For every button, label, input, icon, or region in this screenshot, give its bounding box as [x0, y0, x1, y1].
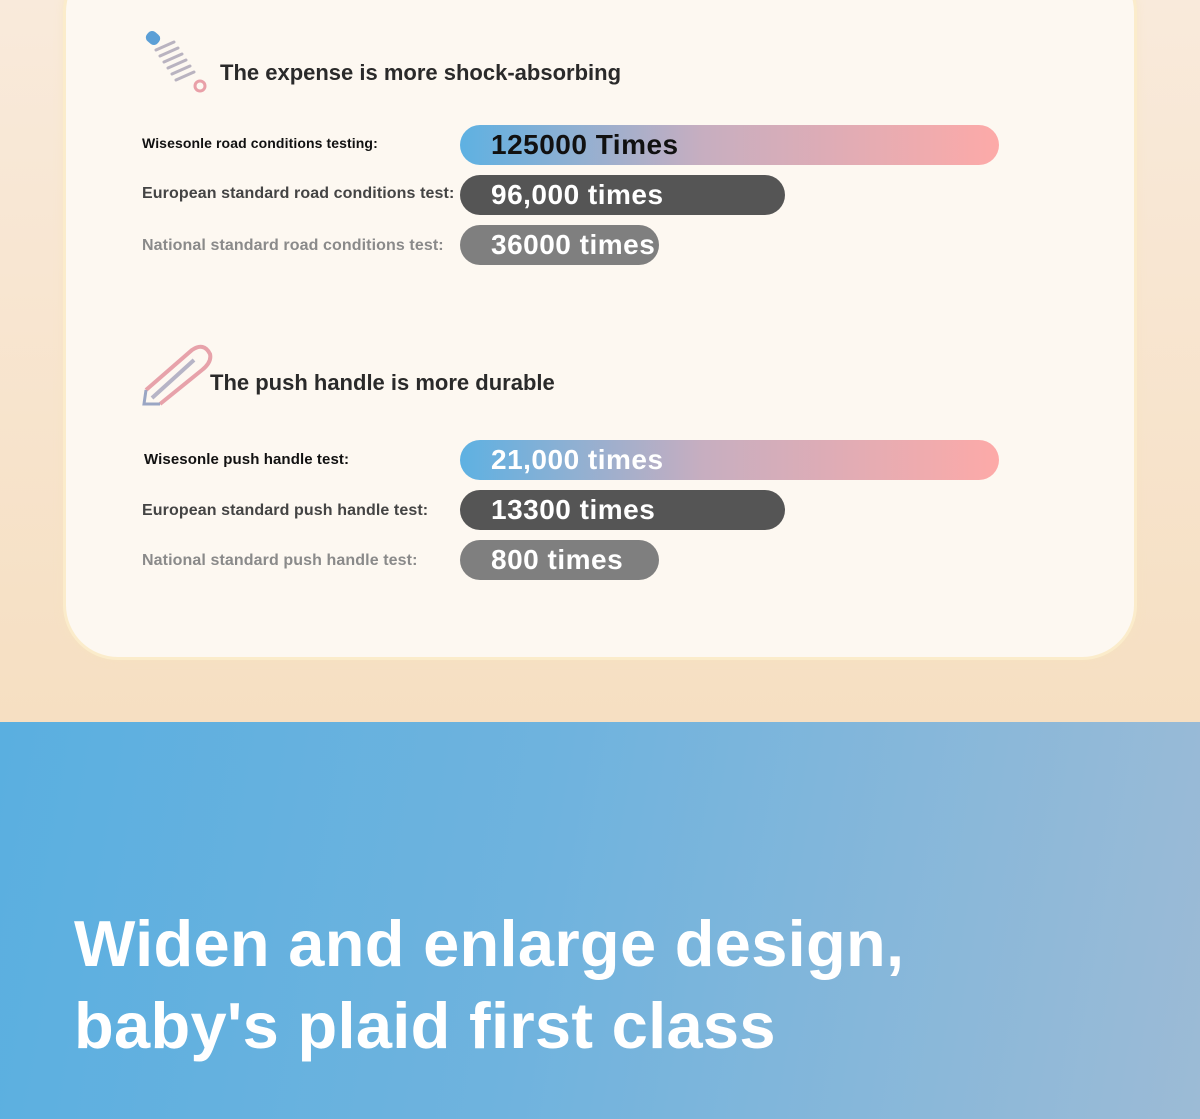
bar: 96000: 96,000 times: [491, 179, 664, 210]
label: wisesonle push: Wisesonle push handle test:: [144, 451, 349, 468]
bar: 96000: [460, 175, 785, 215]
bar: 13300: 13300 times: [491, 494, 655, 525]
label: wisesonle road: Wisesonle road conditions testing:: [142, 135, 378, 151]
bar: 36000: 36000 times: [491, 229, 655, 260]
bar: 800: [460, 540, 659, 580]
panel: blue banner: [0, 722, 1200, 1119]
title: widen and enlarge: Widen and enlarge design,: [74, 907, 904, 980]
panel: test card: [66, 0, 1134, 657]
bar: 125000: [460, 125, 999, 165]
bar: 13300: [460, 490, 785, 530]
title: widen and enlarge: [74, 907, 904, 1062]
bar: 800: 800 times: [491, 544, 623, 575]
label: national road: National standard road conditions test:: [142, 237, 444, 254]
label: european road: European standard road conditions test:: [142, 185, 454, 202]
heading: push handle: The push handle is more durable: [210, 370, 555, 395]
icon: shock absorber: [146, 31, 206, 92]
title: widen and enlarge: baby's plaid first class: [74, 989, 776, 1062]
icon: push handle: [142, 344, 212, 406]
label: european push: European standard push handle test:: [142, 502, 428, 519]
heading: shock-absorbing: The expense is more shock-absorbing: [220, 60, 621, 85]
bar: 125000: 125000 Times: [491, 129, 679, 160]
bar: 36000: [460, 225, 659, 265]
bar: 21000: [460, 440, 999, 480]
bar: 21000: 21,000 times: [491, 444, 664, 475]
label: national push: National standard push handle test:: [142, 552, 418, 569]
